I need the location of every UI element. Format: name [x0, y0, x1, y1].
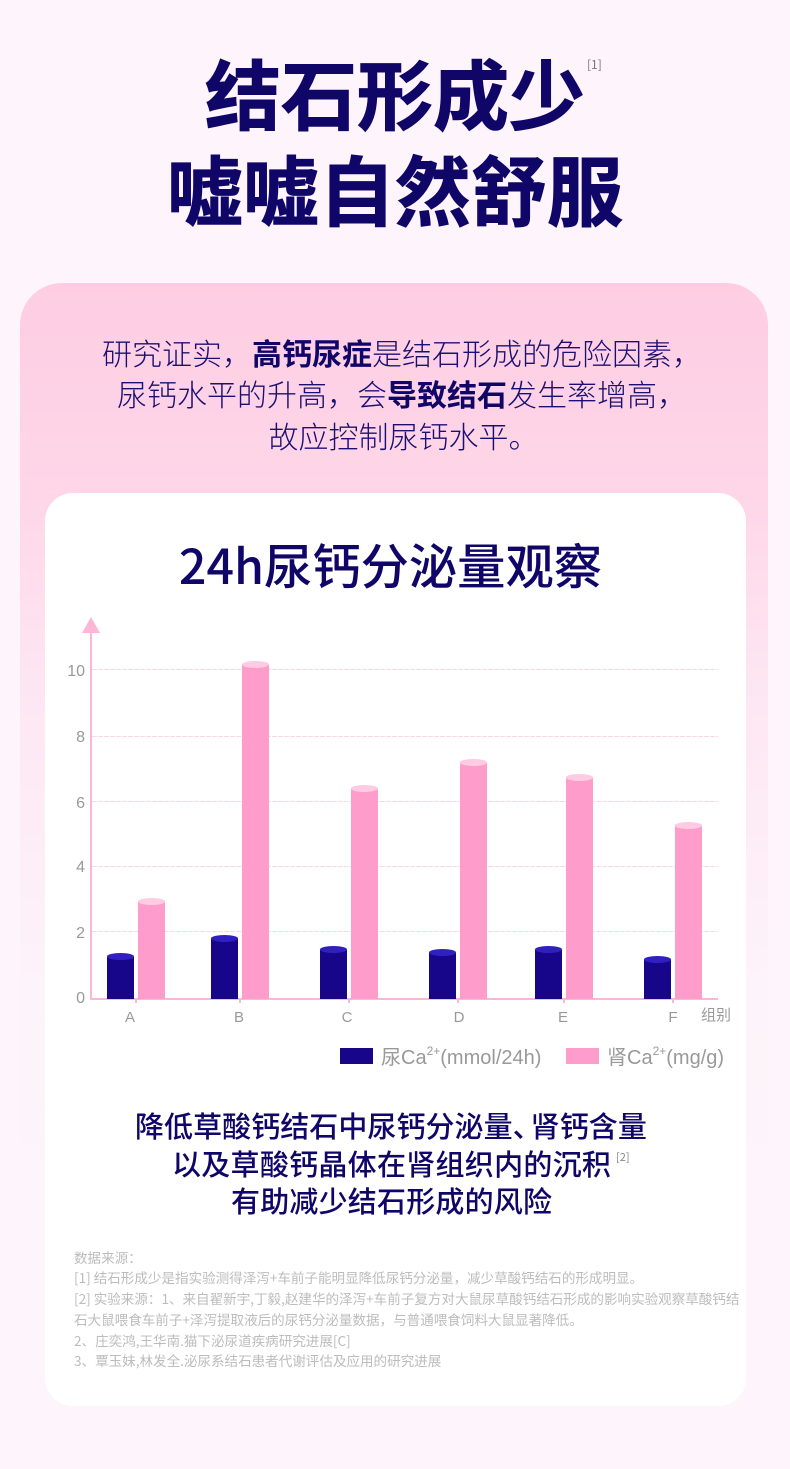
conclusion text: 有助减少结石形成的风险: [231, 1179, 552, 1221]
x axis labels: E: [558, 1009, 568, 1026]
legend: kidney calcium: [566, 1044, 724, 1069]
x axis labels: A: [125, 1009, 135, 1026]
x axis labels: F: [668, 1009, 678, 1026]
legend: kidney calcium: (mg/g): [666, 1047, 724, 1069]
legend: urine calcium: (mmol/24h): [440, 1047, 541, 1069]
data sources: 数据来源：: [74, 1246, 142, 1266]
y axis labels: 0: [76, 990, 85, 1007]
data sources: 2、庄奕鸿,王华南.猫下泌尿道疾病研究进展[C]: [74, 1330, 351, 1350]
legend: urine calcium: 2+: [427, 1044, 440, 1058]
data sources: [1] 结石形成少是指实验测得泽泻+车前子能明显降低尿钙分泌量，减少草酸钙结石的形成明显。: [74, 1267, 643, 1287]
intro text block: [102, 330, 702, 457]
y axis labels: 2: [76, 925, 85, 942]
intro text block: 研究证实，高钙尿症是结石形成的危险因素，: [102, 330, 702, 374]
footnote marker 2: [2]: [616, 1149, 630, 1165]
data sources: 石大鼠喂食车前子+泽泻提取液后的尿钙分泌量数据，与普通喂食饲料大鼠显著降低。: [74, 1309, 583, 1329]
data sources: 3、覃玉妹,林发全.泌尿系结石患者代谢评估及应用的研究进展: [74, 1350, 441, 1370]
y axis labels: 6: [76, 795, 85, 812]
group B bars: [211, 661, 269, 999]
x axis labels: B: [234, 1009, 244, 1026]
footnote marker 1: [1]: [587, 56, 602, 73]
panel: pink background: [20, 283, 768, 1469]
y axis labels: [67, 663, 85, 1007]
y axis labels: 10: [67, 663, 85, 680]
y axis with arrow: [82, 617, 100, 1000]
group E bars: [535, 774, 593, 999]
conclusion text: [135, 1104, 647, 1221]
group D bars: [429, 759, 487, 999]
data sources: [2] 实验来源：1、来自翟新宇,丁毅,赵建华的泽泻+车前子复方对大鼠尿草酸钙结石形成的影响实验观察草酸钙结: [74, 1288, 739, 1308]
x axis labels: D: [454, 1009, 465, 1026]
legend: urine calcium: [340, 1044, 541, 1069]
intro text block: 故应控制尿钙水平。: [268, 413, 538, 457]
title line 2: 嘘嘘自然舒服: [167, 132, 623, 242]
conclusion text: 降低草酸钙结石中尿钙分泌量、肾钙含量: [135, 1104, 647, 1146]
conclusion text: 以及草酸钙晶体在肾组织内的沉积: [172, 1142, 611, 1184]
x axis labels: [125, 1007, 731, 1026]
legend: kidney calcium: 2+: [653, 1044, 666, 1058]
intro text block: 尿钙水平的升高，会导致结石发生率增高，: [117, 371, 687, 415]
title line 1: 结石形成少: [205, 36, 585, 146]
y axis labels: 8: [76, 729, 85, 746]
legend: urine calcium: 尿Ca: [381, 1047, 427, 1069]
x axis with ticks: [90, 998, 718, 1003]
x axis labels: C: [342, 1009, 353, 1026]
x axis labels: 组别: [701, 1007, 731, 1024]
group C bars: [320, 785, 378, 999]
y axis labels: 4: [76, 859, 85, 876]
panel: white chart card: [45, 493, 746, 1406]
group F bars: [644, 822, 702, 999]
legend: kidney calcium: 肾Ca: [607, 1047, 653, 1069]
group A bars: [107, 898, 165, 999]
chart heading: 24h尿钙分泌量观察: [179, 528, 602, 598]
data sources: [74, 1246, 739, 1370]
